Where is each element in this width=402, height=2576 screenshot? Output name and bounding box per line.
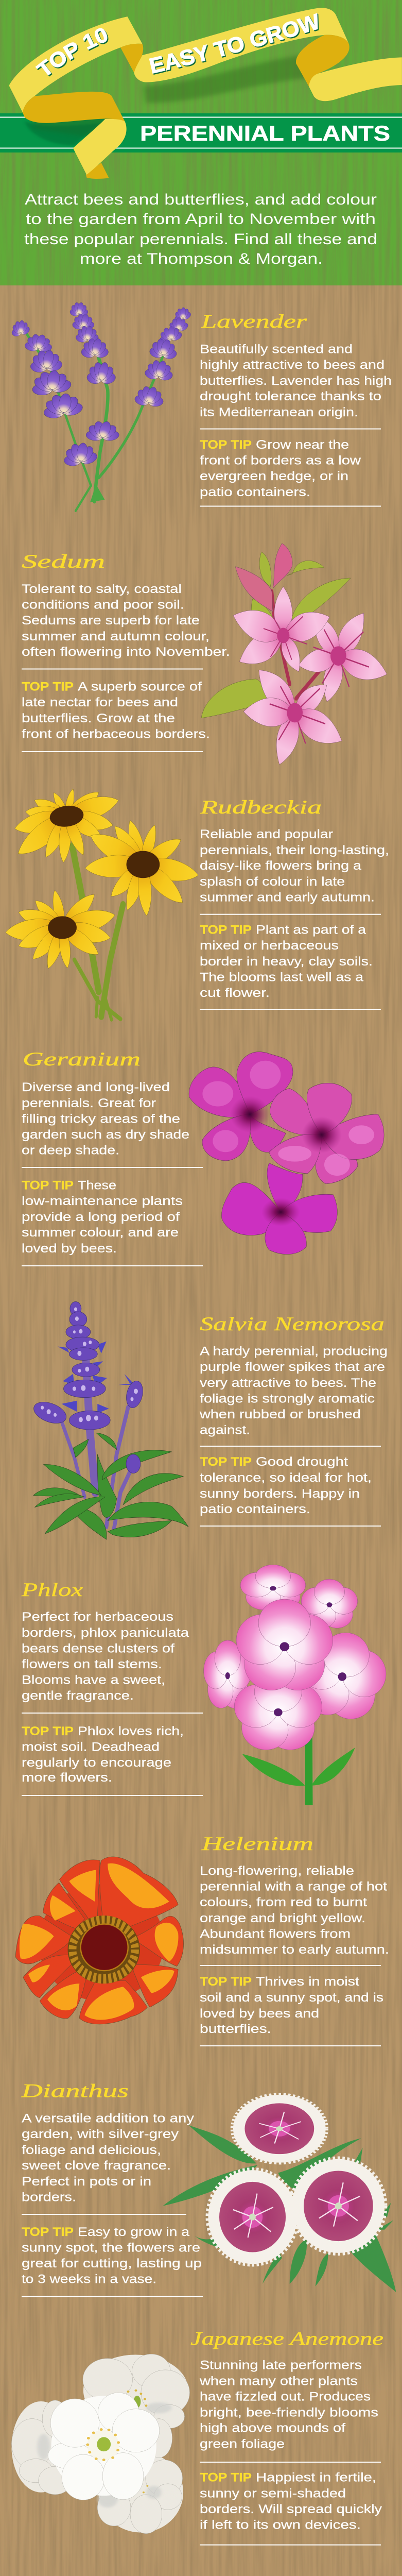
top tip: japanese anemone	[200, 2471, 382, 2532]
description: helenium: Long-flowering, reliable	[200, 1864, 354, 1878]
description: japanese anemone: Stunning late performers	[200, 2359, 362, 2372]
icon: geranium illustration	[189, 1052, 384, 1255]
icon: rudbeckia illustration	[5, 786, 200, 1020]
intro text: these popular perennials. Find all these and	[24, 231, 377, 248]
panel: salvia nemorosa	[32, 1302, 388, 1539]
description: salvia nemorosa: when rubbed or brushed	[199, 1408, 361, 1421]
description: geranium: or deep shade.	[22, 1144, 119, 1158]
top tip: sedum	[22, 680, 210, 741]
description: salvia nemorosa: foliage is strongly aromatic	[200, 1392, 375, 1405]
top tip: lavender: TOP TIP	[200, 438, 252, 452]
description: helenium: orange and bright yellow.	[200, 1911, 365, 1925]
description: sedum: conditions and poor soil.	[22, 598, 184, 612]
description: phlox: bears dense clusters of	[22, 1641, 174, 1655]
description: salvia nemorosa	[199, 1345, 388, 1437]
description: lavender: drought tolerance thanks to	[200, 389, 381, 403]
description: japanese anemone: have fizzled out. Produces	[200, 2390, 371, 2404]
panel: dianthus	[21, 2081, 396, 2297]
top tip: geranium: These	[78, 1179, 116, 1193]
description: geranium: Diverse and long-lived	[22, 1080, 170, 1094]
top tip: lavender: patio containers.	[200, 485, 310, 499]
top tip: sedum: late nectar for bees and	[22, 696, 178, 709]
top tip: phlox: moist soil. Deadhead	[22, 1740, 160, 1754]
description: phlox	[22, 1610, 189, 1703]
top tip: helenium	[200, 1975, 383, 2036]
description: dianthus: garden, with silver-grey	[22, 2127, 179, 2141]
top tip: geranium: loved by bees.	[22, 1242, 117, 1256]
intro text	[24, 191, 377, 267]
description: japanese anemone: high above mounds of	[200, 2421, 345, 2435]
description: dianthus: borders.	[22, 2191, 76, 2205]
icon: phlox illustration	[200, 1565, 398, 1805]
description: lavender: Beautifully scented and	[200, 342, 353, 357]
heading: lavender: Lavender	[201, 311, 307, 332]
description: salvia nemorosa: against.	[200, 1423, 250, 1437]
intro text: to the garden from April to November with	[26, 211, 376, 228]
top tip: geranium: low-maintenance plants	[22, 1194, 183, 1208]
description: dianthus: sweet clove fragrance.	[22, 2159, 171, 2173]
top tip: dianthus	[22, 2225, 202, 2286]
icon: salvia illustration	[32, 1302, 188, 1539]
description: rudbeckia: daisy-like flowers bring a	[200, 859, 362, 873]
description: lavender: butterflies. Lavender has high	[200, 374, 392, 388]
top tip: salvia nemorosa: sunny borders. Happy in	[200, 1487, 360, 1501]
top tip: helenium: soil and a sunny spot, and is	[200, 1991, 383, 2005]
description: japanese anemone: when many other plants	[199, 2374, 358, 2388]
description: phlox: flowers on tall stems.	[22, 1657, 162, 1671]
top tip: japanese anemone: sunny or semi-shaded	[200, 2486, 346, 2500]
heading: geranium: Geranium	[23, 1049, 141, 1070]
top tip: dianthus: Easy to grow in a	[78, 2225, 190, 2239]
description: japanese anemone: bright, bee-friendly blooms	[200, 2405, 378, 2419]
top tip: dianthus: to 3 weeks in a vase.	[22, 2273, 156, 2286]
panel: lavender	[10, 301, 392, 511]
description: sedum: summer and autumn colour,	[22, 630, 209, 643]
intro text: Attract bees and butterflies, and add colour	[25, 191, 377, 208]
description: lavender: its Mediterranean origin.	[200, 405, 358, 419]
top tip: sedum: butterflies. Grow at the	[22, 711, 175, 725]
heading: japanese anemone: Japanese Anemone	[190, 2329, 383, 2349]
heading: dianthus: Dianthus	[21, 2081, 129, 2102]
top tip: lavender	[200, 438, 361, 499]
top tip: salvia nemorosa: TOP TIP	[200, 1455, 252, 1469]
icon: anemone illustration	[11, 2354, 190, 2534]
heading: helenium: Helenium	[201, 1834, 313, 1855]
panel: helenium	[15, 1834, 389, 2046]
top tip: sedum: front of herbaceous borders.	[22, 727, 210, 741]
description: geranium: filling tricky areas of the	[22, 1112, 180, 1126]
top tip: lavender: front of borders as a low	[200, 453, 361, 468]
description: rudbeckia: perennials, their long-lasting,	[200, 843, 389, 857]
top tip: dianthus: TOP TIP	[22, 2225, 74, 2239]
top tip: rudbeckia: mixed or herbaceous	[200, 939, 339, 953]
description: geranium: perennials. Great for	[22, 1096, 156, 1110]
description: phlox: borders, phlox paniculata	[22, 1626, 189, 1640]
top tip: salvia nemorosa	[200, 1455, 372, 1516]
description: dianthus: A versatile addition to any	[22, 2112, 194, 2126]
top tip: rudbeckia: cut flower.	[200, 986, 270, 1000]
description: helenium: midsummer to early autumn.	[200, 1943, 389, 1957]
icon: sedum illustration	[201, 544, 390, 769]
heading: rudbeckia: Rudbeckia	[199, 797, 322, 818]
top tip: sedum: A superb source of	[78, 680, 202, 693]
icon: lavender illustration	[10, 301, 192, 511]
top tip: salvia nemorosa: tolerance, so ideal for hot,	[200, 1471, 372, 1485]
description: japanese anemone	[199, 2359, 378, 2451]
description: salvia nemorosa: purple flower spikes that are	[200, 1360, 385, 1374]
icon: dianthus illustration	[163, 2094, 396, 2292]
description: phlox: Perfect for herbaceous	[22, 1610, 173, 1624]
description: helenium: Abundant flowers from	[200, 1927, 351, 1941]
description: dianthus: Perfect in pots or in	[22, 2175, 151, 2189]
ribbon: yellow banner	[9, 8, 402, 179]
top tip: geranium: summer colour, and are	[22, 1226, 179, 1240]
top tip: helenium: Thrives in moist	[256, 1975, 359, 1989]
description: geranium	[22, 1080, 189, 1158]
top tip: rudbeckia: Plant as part of a	[256, 923, 366, 937]
top tip: lavender: evergreen hedge, or in	[200, 469, 348, 483]
heading: phlox: Phlox	[21, 1580, 83, 1601]
header banner stripe	[0, 113, 402, 152]
description: phlox: gentle fragrance.	[22, 1689, 134, 1703]
top tip: helenium: loved by bees and	[200, 2007, 319, 2021]
icon: helenium illustration	[15, 1857, 184, 2024]
description: salvia nemorosa: very attractive to bees. The	[200, 1376, 376, 1390]
heading: perennial plants: PERENNIAL PLANTS	[140, 121, 390, 145]
description: rudbeckia	[200, 827, 389, 905]
description: salvia nemorosa: A hardy perennial, producing	[200, 1345, 388, 1359]
ribbon text: easy to grow: EASY TO GROW	[149, 13, 319, 75]
description: helenium: colours, from red to burnt	[200, 1895, 367, 1909]
description: sedum: often flowering into November.	[22, 645, 230, 659]
top tip: dianthus: great for cutting, lasting up	[22, 2257, 202, 2270]
top tip: japanese anemone: TOP TIP	[200, 2471, 252, 2485]
panel: rudbeckia	[5, 786, 389, 1020]
top tip: phlox: regularly to encourage	[22, 1756, 171, 1770]
description: geranium: garden such as dry shade	[22, 1128, 189, 1142]
description: rudbeckia: summer and early autumn.	[200, 890, 375, 905]
panel: geranium	[22, 1049, 384, 1266]
description: sedum	[22, 582, 230, 659]
ribbon text: top 10: TOP 10	[35, 28, 108, 77]
panel: phlox	[21, 1565, 398, 1805]
description: dianthus	[22, 2112, 194, 2205]
top tip: japanese anemone: if left to its own devices.	[200, 2518, 361, 2532]
description: dianthus: foliage and delicious,	[22, 2143, 161, 2157]
top tip: rudbeckia: border in heavy, clay soils.	[200, 955, 373, 969]
description: lavender	[200, 342, 392, 419]
top tip: phlox	[22, 1724, 184, 1785]
description: lavender: highly attractive to bees and	[200, 358, 384, 372]
description: phlox: Blooms have a sweet,	[22, 1673, 165, 1687]
description: sedum: Sedums are superb for late	[22, 614, 200, 628]
description: rudbeckia: splash of colour in late	[200, 875, 345, 889]
heading: salvia nemorosa: Salvia Nemorosa	[200, 1314, 384, 1335]
description: sedum: Tolerant to salty, coastal	[22, 582, 182, 596]
top tip: rudbeckia	[200, 923, 373, 1000]
top tip: sedum: TOP TIP	[22, 680, 74, 693]
top tip: helenium: TOP TIP	[200, 1975, 252, 1989]
heading: sedum: Sedum	[22, 551, 105, 572]
top tip: phlox: more flowers.	[22, 1771, 112, 1785]
top tip: phlox: TOP TIP	[22, 1724, 74, 1738]
top tip: phlox: Phlox loves rich,	[78, 1724, 184, 1738]
top tip: rudbeckia: TOP TIP	[200, 923, 252, 937]
top tip: geranium: TOP TIP	[22, 1179, 74, 1193]
top tip: dianthus: sunny spot, the flowers are	[22, 2241, 200, 2255]
intro text: more at Thompson & Morgan.	[80, 250, 323, 267]
top tip: japanese anemone: Happiest in fertile,	[256, 2471, 376, 2485]
top tip: lavender: Grow near the	[256, 438, 349, 452]
panel: japanese anemone	[11, 2329, 383, 2546]
top tip: salvia nemorosa: Good drought	[256, 1455, 348, 1469]
top tip: geranium: provide a long period of	[22, 1210, 180, 1224]
top tip: salvia nemorosa: patio containers.	[200, 1502, 310, 1516]
description: helenium: perennial with a range of hot	[200, 1880, 387, 1894]
top tip: helenium: butterflies.	[200, 2022, 271, 2036]
top tip: rudbeckia: The blooms last well as a	[200, 971, 364, 984]
description: helenium	[200, 1864, 389, 1957]
top tip: geranium	[22, 1179, 183, 1256]
description: japanese anemone: green foliage	[200, 2437, 285, 2451]
top tip: japanese anemone: borders. Will spread quickly	[200, 2502, 382, 2516]
panel: sedum	[22, 544, 390, 769]
description: rudbeckia: Reliable and popular	[200, 827, 333, 841]
